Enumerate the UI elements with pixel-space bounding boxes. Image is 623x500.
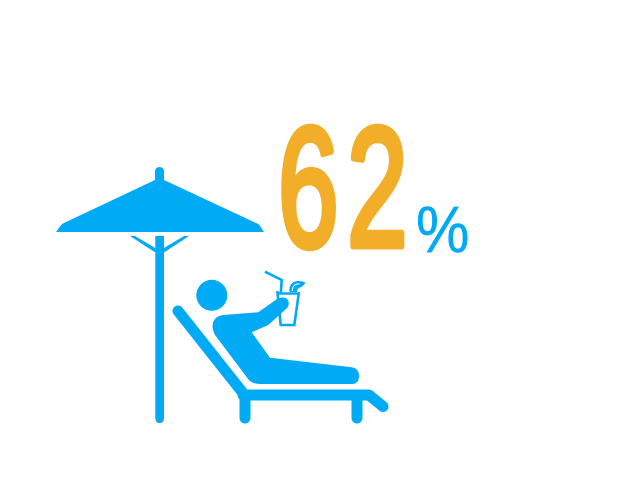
icon: reclining person	[196, 280, 359, 384]
icon: drink glass	[265, 272, 306, 325]
percent sign: %	[416, 193, 469, 267]
icon: beach umbrella	[56, 167, 264, 423]
figure: 62: 62	[278, 94, 408, 283]
icon: sun lounger	[178, 311, 383, 418]
